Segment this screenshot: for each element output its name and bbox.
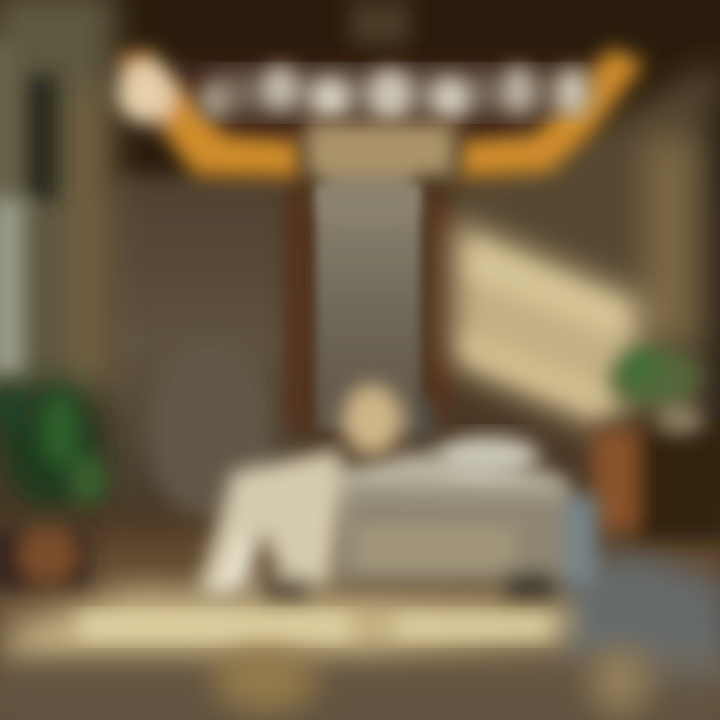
left window xyxy=(0,40,58,375)
chandelier xyxy=(305,0,455,214)
lit right wall highlights xyxy=(465,240,625,412)
pillow xyxy=(436,436,540,476)
ceiling xyxy=(0,0,720,195)
left plant pot xyxy=(0,528,90,590)
right cabinet xyxy=(592,430,720,540)
left wall panel xyxy=(110,175,295,520)
row of ceiling lights xyxy=(210,76,590,110)
wooden columns xyxy=(285,185,450,430)
sofa and reclining figure xyxy=(198,384,597,598)
floor xyxy=(0,530,720,720)
golden ceiling beam xyxy=(115,48,645,178)
left plant leaves xyxy=(0,386,106,506)
sunlit floor band xyxy=(0,590,570,655)
far left arch and window xyxy=(0,0,115,400)
lit right wall panel xyxy=(452,218,645,430)
center panel xyxy=(316,185,420,430)
figure body and blanket xyxy=(198,448,570,598)
right upper wall xyxy=(440,60,720,500)
sofa base xyxy=(335,482,597,596)
sunlit floor highlights xyxy=(80,614,550,640)
lower floor reflection xyxy=(0,646,720,720)
ceiling light highlights xyxy=(199,66,586,121)
right plant xyxy=(609,347,704,434)
left plant xyxy=(0,383,100,507)
figure head xyxy=(342,384,434,456)
